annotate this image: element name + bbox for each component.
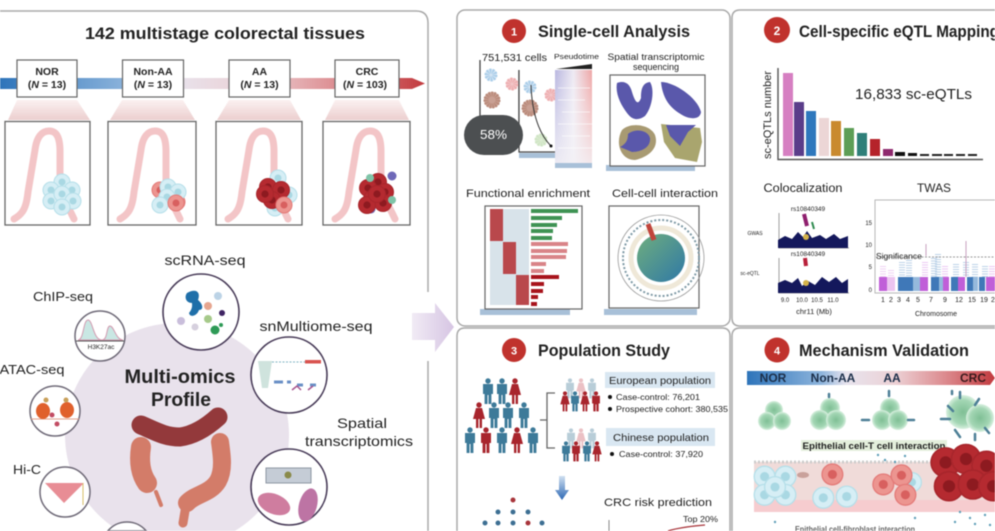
icon: Spatial transcriptomics: Spatial: [337, 415, 387, 431]
chart: UMAP cells: [480, 53, 557, 158]
arrow: to analysis panels: [412, 303, 454, 352]
chart: TWAS: 19: [980, 297, 988, 304]
icon: European group: [560, 378, 600, 411]
panel 2: Cell-specific eQTL Mapping: [732, 10, 995, 326]
chart: spatial transcriptomic sequencing: Spatial transcriptomic: [608, 52, 705, 62]
chart: functional enrichment: Functional enrichment: [466, 188, 590, 200]
stage boxes: AA: [252, 66, 267, 78]
chart: TWAS: 15: [865, 221, 873, 227]
label: Epithelial cell-T cell interaction: Epithelial cell-T cell interaction: [802, 441, 946, 452]
heading: Population Study: [538, 341, 671, 360]
heading: 142 multistage colorectal tissues: 142 multistage colorectal tissues: [85, 24, 365, 43]
chart: TWAS: 9: [943, 297, 947, 304]
badge 2: 2: [774, 24, 781, 38]
chart: CRC risk prediction: CRC risk prediction: [604, 497, 712, 509]
label: European population: [605, 372, 715, 388]
heading: Single-cell Analysis: [538, 22, 690, 41]
chart: cell-cell interaction: Cell-cell interaction: [612, 188, 718, 200]
chart: CRC risk prediction: Top 20%: [683, 515, 718, 524]
chart: TWAS: 0: [869, 288, 873, 294]
bar chart: sc-eQTLs number: sc-eQTLs number: [762, 71, 774, 159]
cells: epithelial cell T-cell row: [758, 391, 994, 440]
label: Chinese population: [606, 428, 715, 446]
stage boxes: (N = 13): [240, 79, 279, 91]
chart: TWAS: 15: [968, 297, 976, 304]
tissue box: NOR: [5, 122, 90, 225]
dot pyramid: [482, 498, 544, 526]
chart: cell-cell interaction: [604, 188, 718, 315]
stage gradient bar: Non-AA: [811, 371, 856, 385]
label: European population: European population: [609, 375, 711, 387]
chart: TWAS: 3: [897, 297, 901, 304]
tissue box: Non-AA: [108, 122, 196, 225]
badge 2: [764, 17, 790, 43]
badge 4: 4: [774, 346, 781, 358]
chart: functional enrichment: [466, 188, 590, 315]
chart: spatial transcriptomic sequencing: sequencing: [633, 62, 679, 72]
chart: TWAS: 1: [881, 297, 885, 304]
arrow: down: [555, 476, 569, 500]
bracket: [540, 393, 555, 448]
chart: TWAS: 2: [889, 297, 893, 304]
icon: cohort people: [465, 378, 538, 453]
chart: TWAS: Chromosome: [915, 311, 957, 318]
stage boxes: Non-AA: [133, 66, 173, 78]
stage gradient bar: [747, 371, 995, 385]
multi-omics background circle: [65, 323, 289, 531]
progression arrow: [0, 78, 425, 89]
icon: ChIP-seq: ChIP-seq: [33, 289, 93, 304]
colon illustration: [140, 417, 222, 523]
stage boxes: (N = 13): [28, 79, 66, 91]
badge 3: 3: [511, 346, 517, 358]
chart: TWAS: 12: [955, 297, 963, 304]
heading: Multi-omics Profile: Profile: [151, 390, 211, 411]
icon: ChIP-seq: H3K27ac: [88, 344, 115, 351]
chart: TWAS: [865, 183, 995, 318]
chart: colocalization: GWAS: [747, 231, 763, 237]
icon: ChIP-seq: [33, 289, 125, 361]
stage gradient bar: AA: [883, 371, 901, 385]
icon: Chinese group: [562, 428, 602, 461]
panel: 142 multistage colorectal tissues: [0, 11, 428, 531]
chart: pseudotime heatmap: [554, 52, 599, 168]
stage boxes: CRC: [356, 66, 379, 78]
icon: scRNA-seq: [163, 252, 246, 350]
chart: colocalization: Colocalization: [764, 183, 842, 195]
chart: TWAS: 2: [991, 297, 995, 304]
chart: pseudotime heatmap: Pseudotime: [554, 52, 599, 61]
chart: colocalization: chr11 (Mb): [796, 307, 832, 316]
chart: TWAS: 5: [869, 265, 873, 271]
chart: TWAS: TWAS: [917, 183, 951, 195]
chart: TWAS: Significance: [876, 251, 922, 261]
panel 4: Mechanism Validation: [732, 328, 995, 531]
tissue layer: [754, 445, 995, 526]
chart: colocalization: sc-eQTL: [740, 271, 760, 277]
chart: colocalization: 10.0: [796, 298, 808, 304]
label: Chinese population: Chinese population: [613, 432, 709, 444]
icon: Hi-C: [13, 462, 90, 517]
chart: UMAP cells: 751,531 cells: [482, 53, 547, 64]
icon: partially visible omics circle: [108, 522, 146, 531]
icon: snMultiome-seq: snMultiome-seq: [260, 318, 372, 334]
icon: Spatial transcriptomics: transcriptomics: [305, 433, 413, 449]
text: European cohort sizes: Case-control: 76,201: [616, 392, 700, 402]
badge 3: [502, 338, 526, 362]
annotation: 16,833 sc-eQTLs: 16,833 sc-eQTLs: [855, 86, 972, 103]
tissue box: AA: [216, 122, 302, 225]
chart: colocalization: rs10840349: [791, 251, 826, 258]
stage boxes: (N = 13): [134, 79, 172, 91]
stage boxes: NOR: [35, 66, 59, 78]
stage boxes: [8, 60, 409, 120]
chart: TWAS: 5: [916, 297, 920, 304]
panel 3: Population Study: [457, 328, 730, 531]
chart: colocalization: 10.5: [811, 298, 823, 304]
tissue box: CRC: [323, 122, 410, 225]
chart: TWAS: 10: [865, 243, 873, 249]
badge 4: [764, 338, 790, 362]
icon: Hi-C: Hi-C: [13, 462, 41, 477]
chart: TWAS: 4: [906, 297, 910, 304]
heading: Multi-omics Profile: [124, 367, 236, 411]
icon: scRNA-seq: scRNA-seq: [164, 252, 246, 268]
bar chart: sc-eQTLs number: [762, 68, 983, 160]
heading: Multi-omics Profile: Multi-omics: [124, 367, 236, 388]
chart: colocalization: rs10840349: [791, 206, 826, 213]
stage boxes: (N = 103): [343, 79, 387, 91]
panel 1: Single-cell Analysis: [457, 10, 730, 326]
icon: ATAC-seq: ATAC-seq: [0, 362, 64, 377]
chart: colocalization: 9.0: [781, 298, 790, 304]
tumour status badge: 58%: 58%: [480, 127, 507, 142]
text: European cohort sizes: Prospective cohort: 380,535: [616, 404, 728, 414]
chart: TWAS: 7: [929, 297, 933, 304]
badge 1: 1: [511, 26, 517, 38]
chart: spatial transcriptomic sequencing: [606, 52, 705, 171]
icon: snMultiome-seq: [251, 318, 372, 413]
chart: CRC risk prediction: [604, 497, 718, 531]
stage gradient bar: NOR: [760, 371, 787, 385]
icon: Spatial transcriptomics: [251, 415, 413, 525]
stage gradient bar: CRC: [960, 371, 986, 385]
tumour status badge: 58%: [464, 115, 523, 155]
chart: colocalization: [740, 183, 849, 316]
heading: Mechanism Validation: [799, 341, 969, 360]
badge 1: [502, 19, 526, 43]
icon: ATAC-seq: [0, 362, 80, 436]
chart: colocalization: 11.0: [827, 298, 839, 304]
text: European cohort sizes: [608, 392, 728, 414]
text: Chinese cohort size: Case-control: 37,920: [619, 449, 703, 459]
